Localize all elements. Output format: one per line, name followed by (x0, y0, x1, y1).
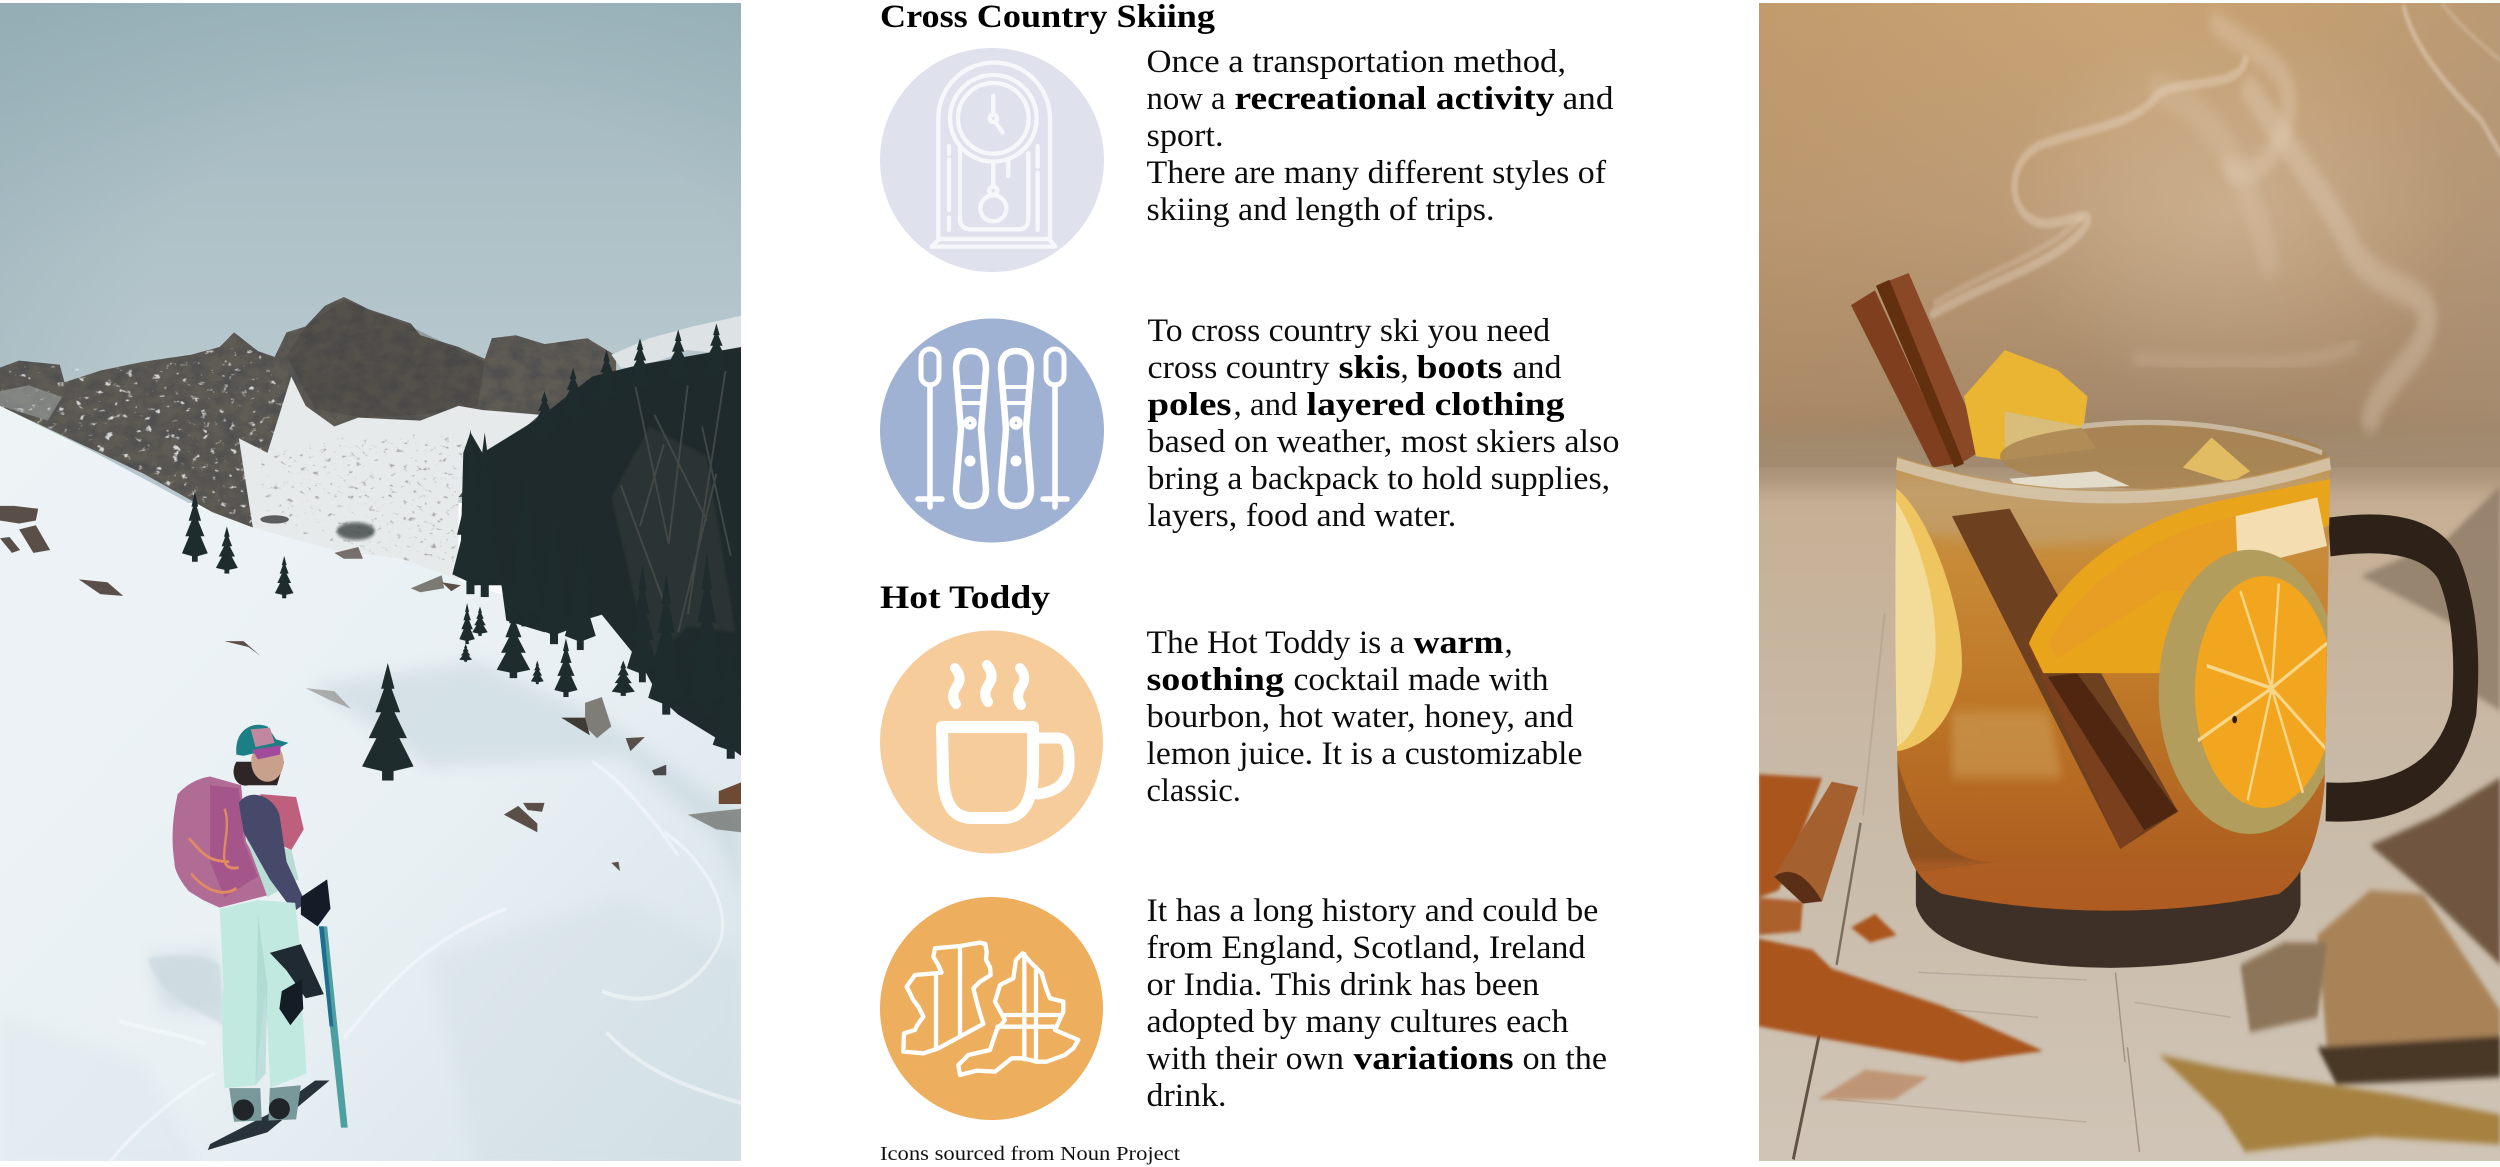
text block: history and variations: on the (1522, 1041, 1607, 1077)
text block: history and variations: or India. This drink has been (1146, 967, 1539, 1003)
wooden table (1731, 434, 2500, 1167)
text block: recreational activity: sport. (1146, 118, 1224, 154)
text block: warm soothing cocktail: classic. (1146, 773, 1241, 809)
text block: equipment: layers, food and water. (1148, 498, 1456, 534)
cinnamon powder on the table (1759, 774, 2043, 1100)
lemon slice top (2029, 479, 2332, 673)
text block: recreational activity: There are many different styles of (1146, 155, 1606, 191)
text block: warm soothing cocktail: soothing (1146, 662, 1285, 698)
lemon wheel (2159, 550, 2341, 834)
rocks in the snow (0, 506, 741, 871)
text block: warm soothing cocktail: lemon juice. It is a customizable (1146, 736, 1582, 772)
lemon and ice on top (1964, 350, 2327, 490)
mug base (1916, 868, 2301, 968)
mug body with drink (1892, 449, 2341, 928)
text block: equipment: cross country (1148, 350, 1330, 386)
text block: equipment: and (1512, 350, 1562, 386)
small fir trees (182, 491, 414, 781)
burlap cloth (2159, 486, 2500, 1152)
text block: recreational activity: skiing and length of trips. (1146, 192, 1494, 228)
text block: warm soothing cocktail: cocktail made with (1294, 662, 1549, 698)
icon: map of Britain and Ireland in orange circle (880, 897, 1103, 1120)
text block: history and variations: with their own (1146, 1041, 1344, 1077)
text block: equipment: , and (1234, 387, 1298, 423)
text block: equipment: based on weather, most skiers also (1148, 424, 1620, 460)
icon: grandfather clock in lavender circle (880, 48, 1104, 272)
sky (0, 3, 741, 503)
cinnamon stick on the table (1774, 782, 1858, 904)
icon: skis and poles in blue circle (880, 318, 1104, 542)
text block: warm soothing cocktail: , (1504, 625, 1513, 661)
mug rim (1897, 464, 2330, 497)
cinnamon stick inside (1952, 509, 2178, 849)
text block: recreational activity: recreational activity (1234, 81, 1555, 117)
text block: warm soothing cocktail: The Hot Toddy is a (1146, 625, 1405, 661)
text block: equipment (1148, 313, 1620, 534)
text block: recreational activity: Once a transportation method, (1146, 44, 1566, 80)
text block: recreational activity: and (1562, 81, 1614, 117)
text block: equipment: To cross country ski you need (1148, 313, 1551, 349)
text block: recreational activity: now a (1146, 81, 1226, 117)
skier (148, 725, 348, 1150)
text block: recreational activity (1146, 44, 1614, 228)
text block: equipment: layered clothing (1306, 387, 1565, 423)
evergreen forest (452, 324, 749, 759)
text block: history and variations (1146, 893, 1607, 1114)
text block: history and variations: from England, Scotland, Ireland (1146, 930, 1586, 966)
photo: skier on a snowy mountain slope (0, 3, 741, 1161)
snow bowl with scattered rocks (239, 376, 540, 579)
text block: equipment: skis (1338, 350, 1401, 386)
section: hot toddy (880, 580, 1607, 1165)
text block: warm soothing cocktail: bourbon, hot water, honey, and (1146, 699, 1574, 735)
heading: cross country skiing: Cross Country Skiing (880, 0, 1216, 35)
cinnamon sticks above the rim (1851, 273, 1984, 468)
text block: warm soothing cocktail: warm (1414, 625, 1504, 661)
section: cross country skiing (880, 0, 1620, 542)
text block: equipment: poles (1148, 387, 1232, 423)
text block: history and variations: variations (1354, 1041, 1514, 1077)
background wall (1750, 0, 2500, 479)
rising steam (1933, 4, 2500, 419)
text block: history and variations: drink. (1146, 1078, 1226, 1114)
icon: steaming mug in peach circle (880, 630, 1103, 854)
photo: steaming hot toddy mug (1759, 3, 2500, 1161)
text block: equipment: boots (1416, 350, 1503, 386)
heading: hot toddy: Hot Toddy (880, 580, 1051, 616)
mountain ridge (0, 297, 741, 532)
ski tracks (110, 762, 741, 1162)
mug handle (2326, 534, 2466, 802)
text block: warm soothing cocktail (1146, 625, 1582, 809)
text block: history and variations: It has a long history and could be (1146, 893, 1598, 929)
snow shading (0, 662, 741, 1167)
snow slope (0, 406, 741, 1167)
text block: equipment: , (1400, 350, 1409, 386)
lemon slice left (1893, 486, 1962, 752)
text block: history and variations: adopted by many cultures each (1146, 1004, 1569, 1040)
text block: equipment: bring a backpack to hold supplies, (1148, 461, 1610, 497)
footer: icon credit: Icons sourced from Noun Project (880, 1143, 1180, 1165)
